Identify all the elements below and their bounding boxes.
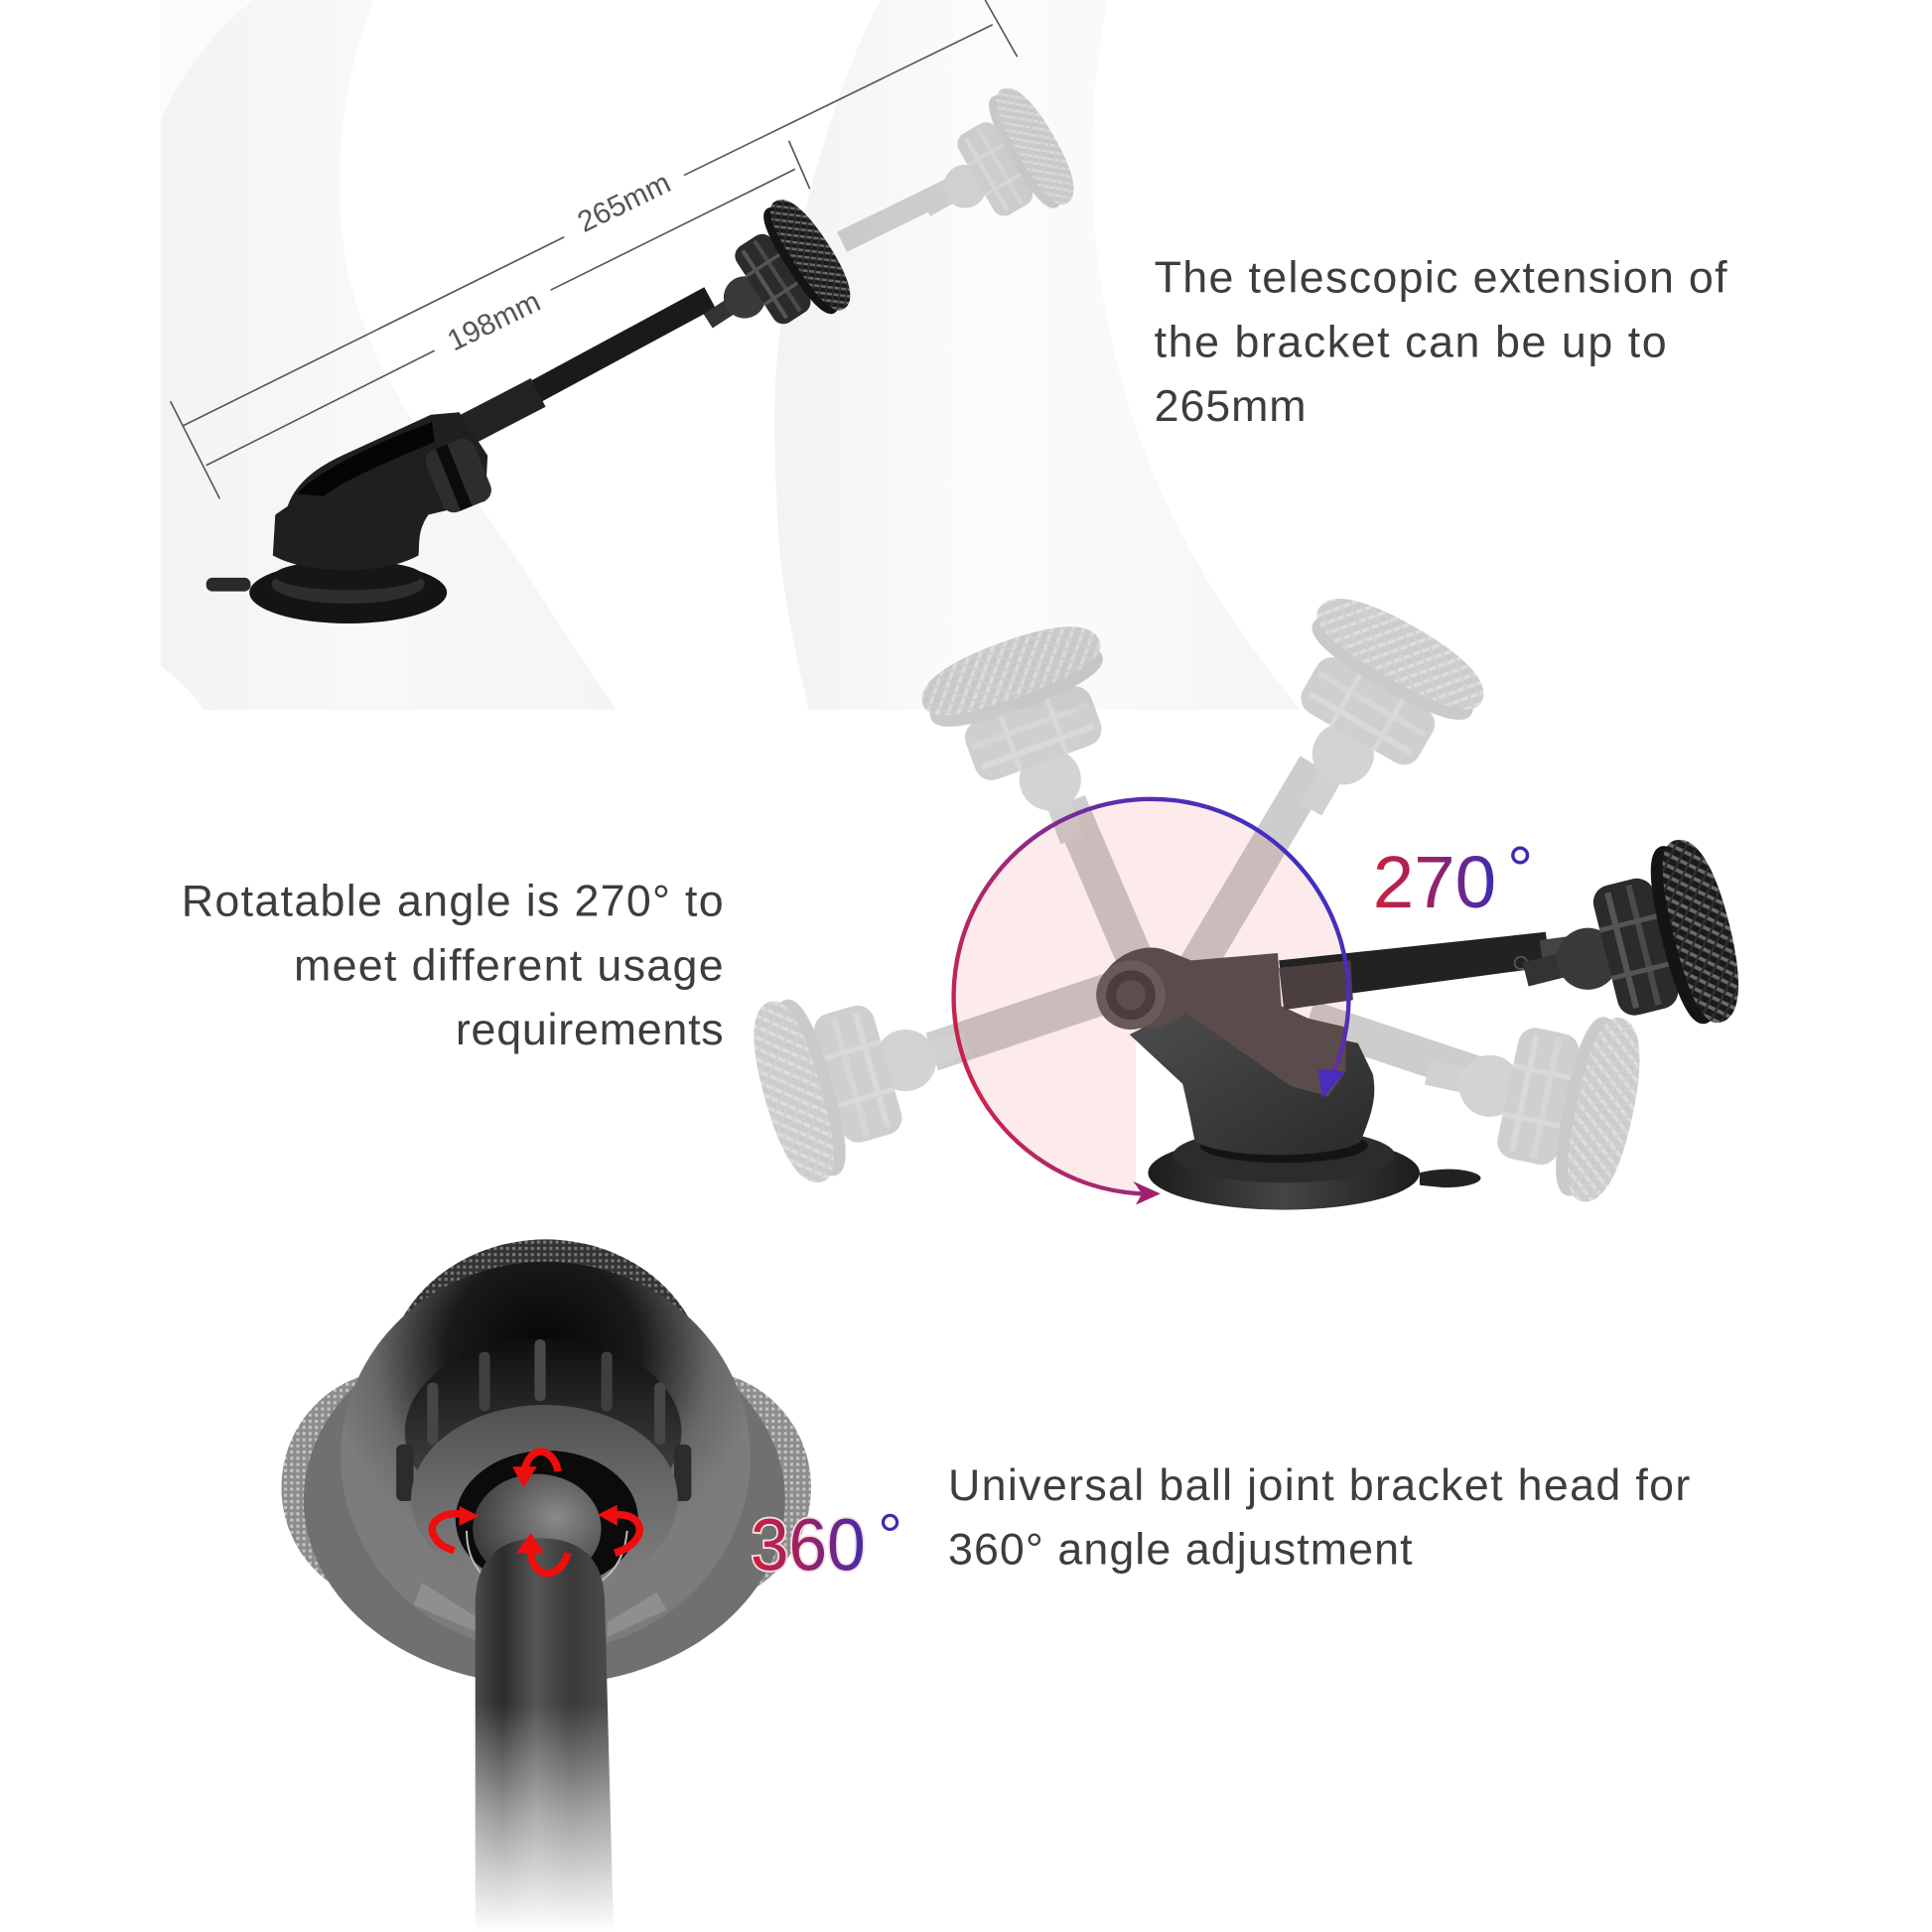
socket (456, 1450, 638, 1588)
dimension line: 265mm: 265mm (573, 167, 676, 239)
suction base (207, 561, 447, 623)
stem (476, 1538, 614, 1932)
text: rotation description: Rotatable angle is 270° to (182, 877, 724, 926)
panel: ball joint close-up (282, 1239, 902, 1932)
bracket head (673, 190, 863, 374)
text: telescopic description (1155, 253, 1727, 431)
active arm (1279, 833, 1752, 1065)
swirl background (161, 0, 1300, 710)
arrow: left (432, 1506, 479, 1551)
suction base (1148, 1129, 1480, 1210)
text: ball joint description: Universal ball joint bracket head for (948, 1460, 1690, 1510)
ghost arm: upper right (1191, 581, 1497, 975)
arm housing (273, 412, 487, 570)
panel: telescopic extension (161, 0, 1300, 710)
label: 360 degrees: 360 (751, 1503, 866, 1587)
carbon plate edge (385, 1239, 706, 1526)
arrow: down (516, 1533, 568, 1574)
ball (473, 1474, 602, 1583)
panel: 270 degree rotation diagram (740, 581, 1752, 1210)
text: telescopic description: The telescopic extension of (1155, 253, 1727, 303)
text: telescopic description: 265mm (1155, 381, 1307, 431)
red arrows (432, 1451, 639, 1574)
dimension line: 198mm (207, 141, 810, 466)
socket highlights (467, 1531, 627, 1583)
label: 270 degrees: 270 (1373, 840, 1496, 923)
text: rotation description: requirements (456, 1005, 724, 1054)
housing sleeve (1279, 960, 1353, 1010)
ghost arm: lower right (1309, 981, 1652, 1208)
ghost arm: upper left (912, 611, 1161, 975)
pivot bolt (1096, 960, 1166, 1030)
text: rotation description (182, 877, 724, 1054)
arrow: up (512, 1451, 558, 1487)
label: 270 degrees: ° (1507, 833, 1533, 905)
text: ball joint description (948, 1460, 1690, 1574)
clamp lever (422, 435, 495, 516)
housing highlight (296, 422, 435, 496)
rotation sector tint (953, 799, 1348, 1193)
ghost extended bracket head (842, 78, 1086, 266)
fins (414, 1583, 666, 1637)
mount: retracted bracket (207, 190, 863, 623)
dimension line: 265mm (171, 0, 1018, 498)
text: telescopic description: the bracket can be up to (1155, 317, 1667, 366)
telescopic arm (467, 298, 710, 430)
dimension line: 198mm: 198mm (443, 285, 546, 357)
side lobes (282, 1370, 811, 1604)
knurled nut (396, 1338, 691, 1526)
arm housing (1099, 948, 1345, 1096)
collar ring (411, 1405, 678, 1592)
main disk (341, 1262, 751, 1652)
arrow: right (598, 1505, 639, 1553)
ghost arm: left (740, 952, 1117, 1190)
text: rotation description: meet different usage (294, 940, 724, 990)
neck body (1130, 1006, 1374, 1155)
label: 360 degrees: ° (878, 1502, 902, 1571)
arrow arc: 270 degrees (954, 799, 1348, 1205)
lower body (304, 1314, 785, 1685)
text: ball joint description: 360° angle adjustment (948, 1524, 1413, 1574)
